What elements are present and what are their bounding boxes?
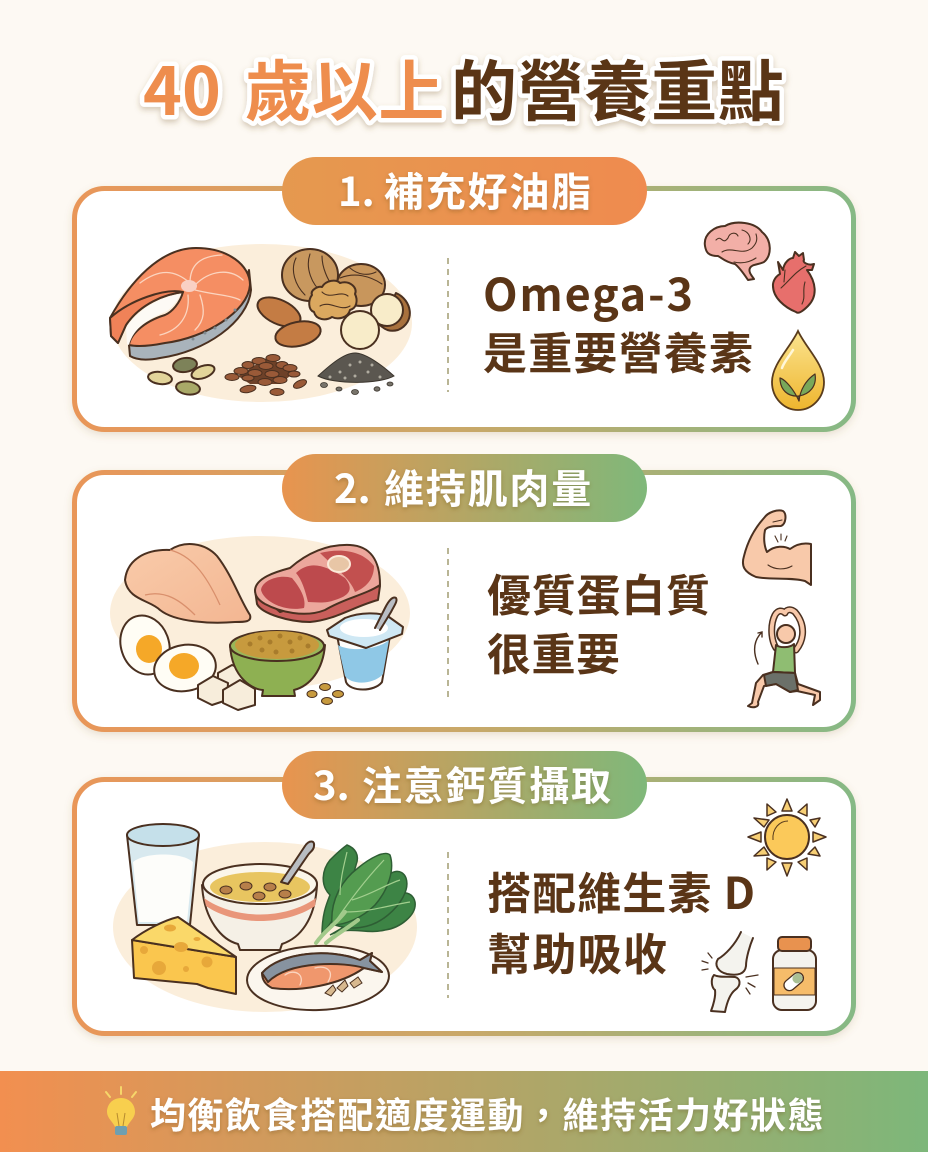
panel: 維持肌肉量 xyxy=(74,454,854,730)
footer banner xyxy=(0,1071,928,1152)
flax seeds xyxy=(225,354,308,396)
footer text: 均衡飲食搭配適度運動，維持活力好狀態 xyxy=(150,1087,825,1139)
pumpkin seeds xyxy=(147,356,216,396)
dashed divider 3 xyxy=(447,852,449,998)
card frame 2 xyxy=(74,472,854,730)
heading pill 2 xyxy=(282,454,647,522)
salmon steak xyxy=(110,248,251,360)
walnuts and kernel xyxy=(253,249,410,351)
text: 優質蛋白質 很重要: 很重要 xyxy=(487,619,620,683)
icon: supplement bottle xyxy=(773,937,816,1010)
boiled eggs xyxy=(113,609,220,696)
icon: flexed arm xyxy=(743,510,811,585)
text: 優質蛋白質 很重要 xyxy=(487,560,710,683)
panel: 注意鈣質攝取 xyxy=(74,751,854,1034)
icon: heart xyxy=(773,252,815,313)
title: 40 xyxy=(143,39,221,135)
text: Omega-3 是重要營養素: Omega-3 xyxy=(483,259,693,324)
loose beans xyxy=(307,684,344,704)
heading pill 3: 3. xyxy=(313,754,350,812)
lentil bowl xyxy=(230,631,325,696)
text: Omega-3 是重要營養素: 是重要營養素 xyxy=(483,318,753,382)
heading pill 2: 2. xyxy=(334,457,371,515)
icon: sun xyxy=(748,799,826,876)
steak xyxy=(255,545,380,622)
text: 搭配維生素 D 幫助吸收: 搭配維生素 D xyxy=(487,858,755,922)
heading pill 3: 注意鈣質攝取 xyxy=(362,754,613,812)
text: 優質蛋白質 很重要: 優質蛋白質 xyxy=(487,560,710,624)
text: 搭配維生素 D 幫助吸收 xyxy=(487,858,755,983)
illustration: protein foods xyxy=(110,536,410,710)
heading pill 2: 維持肌肉量 xyxy=(384,457,593,515)
heading pill 1: 1. xyxy=(338,160,375,218)
text: Omega-3 是重要營養素 xyxy=(483,259,753,382)
glass of milk xyxy=(127,824,199,925)
title xyxy=(143,39,784,135)
panel: 補充好油脂 xyxy=(74,157,854,430)
heading pill 3 xyxy=(282,751,647,819)
tofu xyxy=(198,665,255,710)
cereal bowl xyxy=(202,842,317,950)
icon: oil drop with leaf xyxy=(772,331,824,410)
heading pill 1 xyxy=(282,157,647,225)
icon: brain xyxy=(705,223,770,280)
dashed divider 1 xyxy=(447,258,449,392)
icon: knee joint xyxy=(702,932,758,1012)
spinach xyxy=(316,845,415,943)
dashed divider 2 xyxy=(447,548,449,697)
card frame 1 xyxy=(74,188,854,430)
illustration: omega-3 foods xyxy=(110,244,412,402)
icon: light bulb xyxy=(106,1087,136,1135)
cheese wedge xyxy=(132,917,236,994)
chia seeds xyxy=(318,353,394,394)
title: 歲以上 xyxy=(245,39,445,135)
chicken breast xyxy=(125,544,250,623)
illustration: calcium foods xyxy=(113,824,417,1012)
icon: stretching person xyxy=(748,610,820,707)
yogurt cup xyxy=(327,597,403,690)
heading pill 1: 補充好油脂 xyxy=(384,160,593,218)
title: 的營養重點 xyxy=(451,39,784,135)
plate of fish xyxy=(246,944,390,1012)
card frame 3 xyxy=(74,780,854,1034)
text: 搭配維生素 D 幫助吸收: 幫助吸收 xyxy=(487,919,667,983)
